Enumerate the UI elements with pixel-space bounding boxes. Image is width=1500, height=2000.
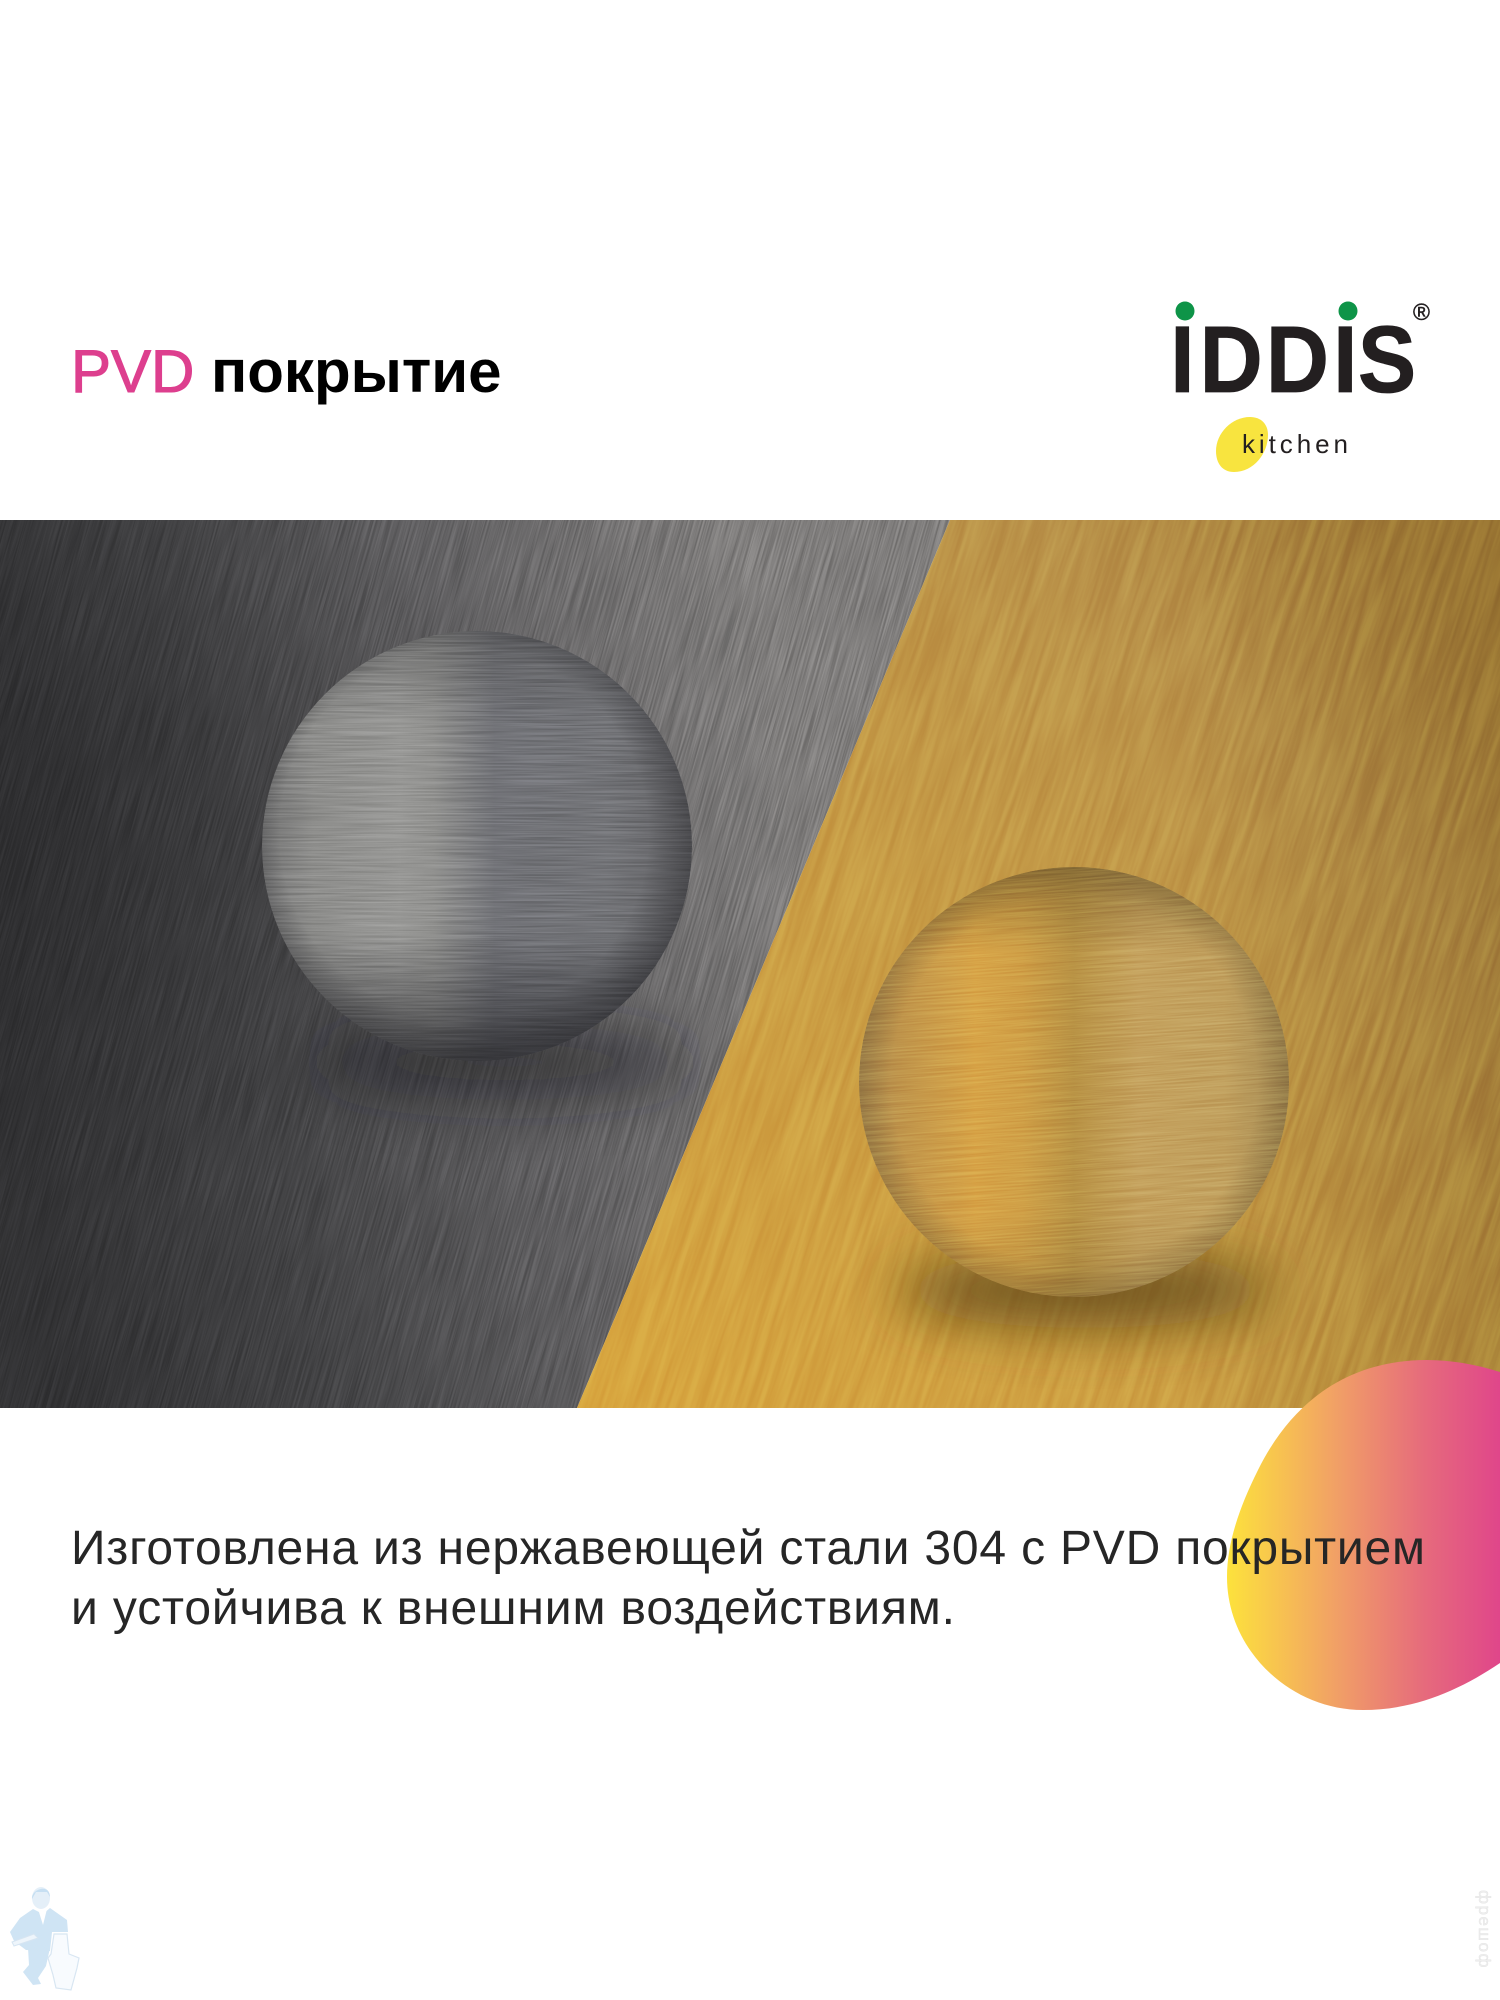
description line 1: Изготовлена из нержавеющей стали 304 с PVD покрытием xyxy=(71,1522,1425,1575)
yellow spot xyxy=(1216,417,1268,472)
logo dots xyxy=(1176,302,1358,320)
heading: PVD покрытие xyxy=(71,338,502,405)
panel: gold metal xyxy=(577,520,1500,1408)
icon: plumber watermark xyxy=(10,1887,79,1990)
plumber head xyxy=(32,1887,50,1909)
plumber hair xyxy=(32,1889,50,1899)
logo wordmark: IDDIS xyxy=(1170,307,1416,413)
description line 2: и устойчива к внешним воздействиям. xyxy=(71,1582,955,1635)
plumber legs xyxy=(23,1948,50,1985)
watermark text: фрешоф xyxy=(1475,1890,1494,1969)
photo: brushed metal panels xyxy=(0,520,1500,1408)
gradient blob xyxy=(1227,1360,1500,1710)
plumber jacket xyxy=(10,1908,68,1951)
description text xyxy=(71,1522,1425,1635)
graphite sphere xyxy=(262,631,692,1061)
logo: iddis kitchen xyxy=(1170,299,1430,472)
registered mark: ® xyxy=(1413,299,1430,325)
kitchen label: kitchen xyxy=(1242,429,1348,459)
plumber shirt xyxy=(38,1909,47,1925)
shadow under graphite sphere xyxy=(310,1024,700,1100)
shadow under gold sphere xyxy=(895,1252,1275,1328)
panel: graphite metal xyxy=(0,520,950,1408)
toilet xyxy=(48,1934,79,1990)
plumber wrench xyxy=(12,1934,38,1946)
gold sphere xyxy=(859,867,1289,1297)
